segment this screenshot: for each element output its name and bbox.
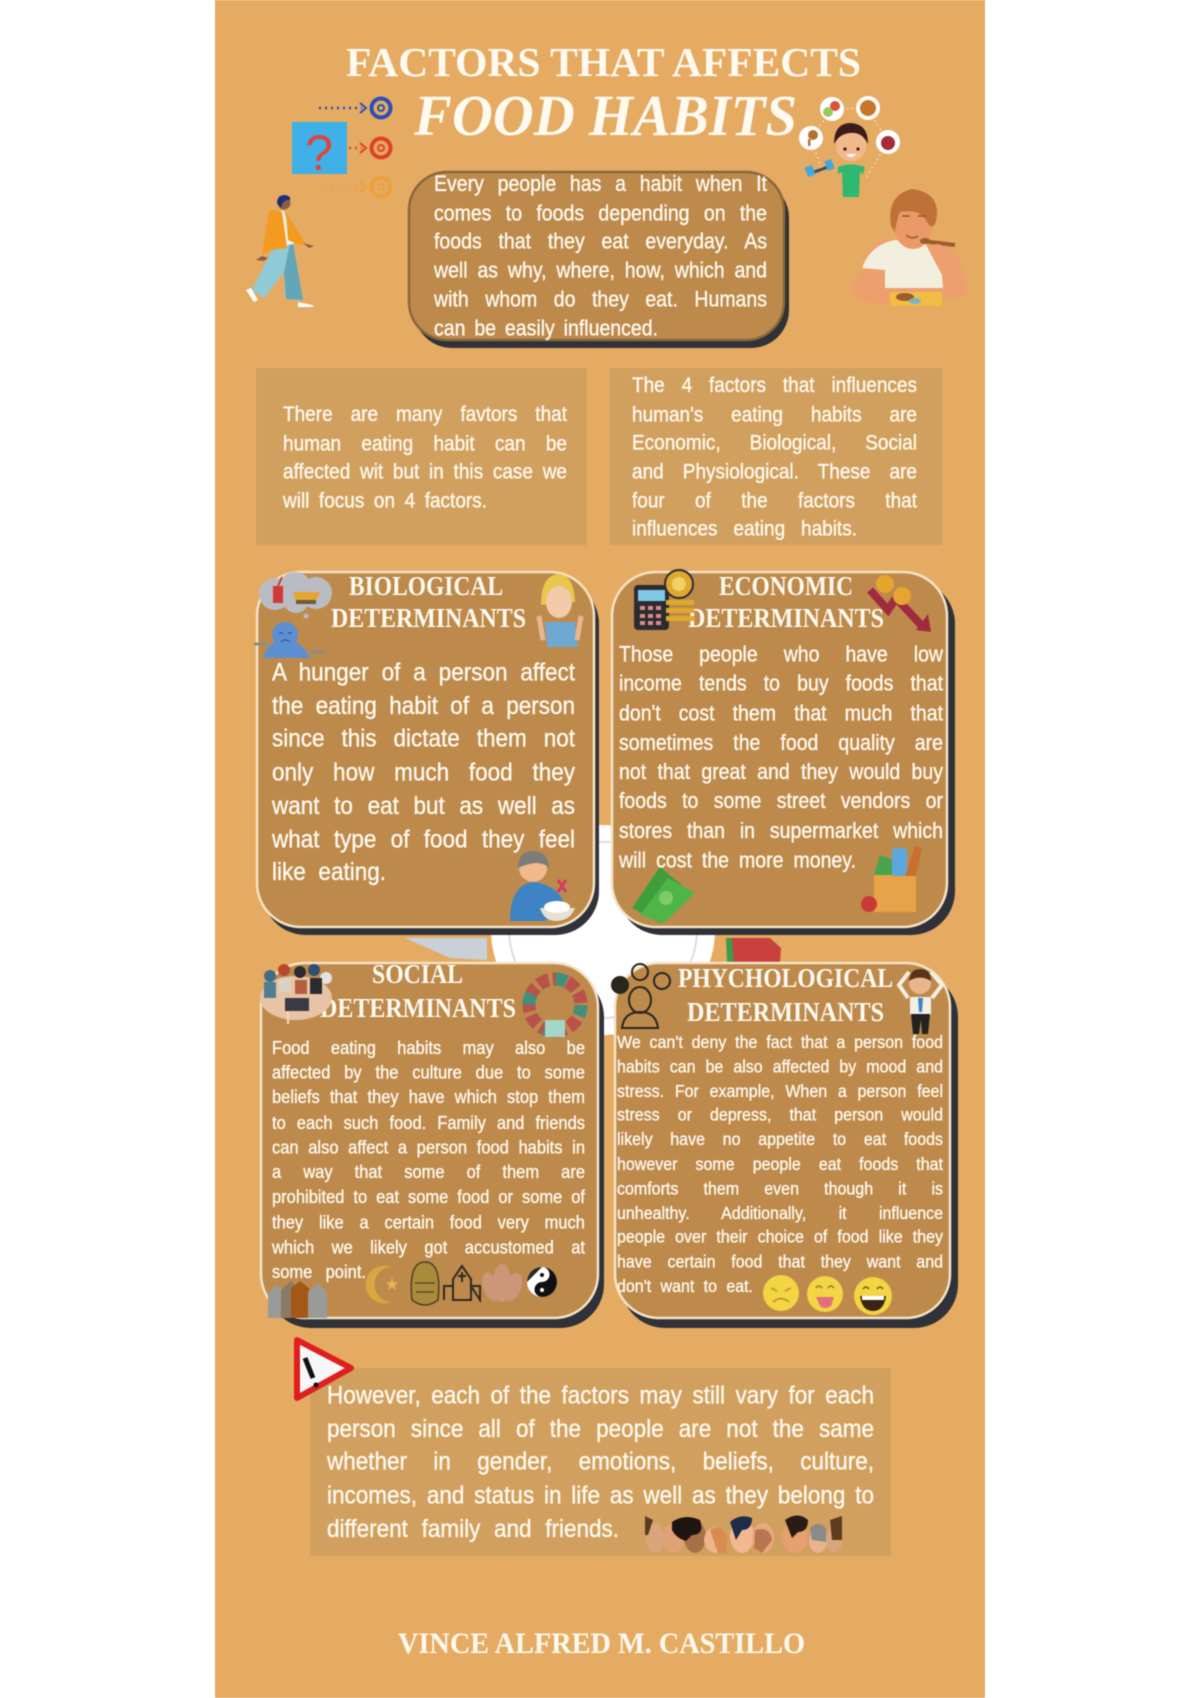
body text: prohibited to eat some food or some of — [272, 1188, 585, 1208]
icon: person eating — [852, 188, 966, 306]
card shape — [615, 963, 958, 1328]
heading: DETERMINANTS — [320, 993, 516, 1023]
text: four factors: human's eating habits are — [632, 403, 917, 426]
heading: SOCIAL — [372, 959, 463, 989]
intro text: foods that they eat everyday. As — [434, 230, 767, 254]
icon: person with no appetite — [510, 851, 575, 921]
body text: Those people who have low — [619, 642, 943, 667]
icon: crescent and star: ★ — [384, 1275, 400, 1295]
body text: however some people eat foods that — [617, 1155, 943, 1174]
text: four factors: influences eating habits. — [632, 518, 857, 541]
icon: stressed man — [899, 969, 942, 1034]
box shape — [407, 170, 790, 349]
page background — [215, 0, 985, 1698]
note text — [326, 1381, 874, 1543]
icon: blond boy with cutlery — [539, 574, 581, 647]
icon: blue arrow target — [319, 98, 390, 118]
body text: foods to some street vendors or — [619, 789, 943, 814]
body text: to each such food. Family and friends — [272, 1113, 585, 1133]
body text: unhealthy. Additionally, it influence — [617, 1204, 943, 1223]
icon: food thought cloud — [259, 572, 332, 618]
body text: will cost the more money. — [619, 848, 856, 873]
card shape — [612, 572, 955, 935]
icon: group of people — [268, 1281, 327, 1318]
note text: person since all of the people are not the same — [327, 1414, 874, 1442]
body text: people over their choice of food like they — [617, 1229, 943, 1248]
text: four factors: four of the factors that — [632, 489, 917, 513]
icon: banknotes — [632, 867, 695, 923]
icon: boy with food bubbles — [798, 95, 901, 198]
icon: buddha head — [411, 1262, 439, 1305]
text: four factors: and Physiological. These are — [632, 460, 917, 484]
body text: Food eating habits may also be — [272, 1038, 585, 1058]
body text: some point. — [272, 1262, 366, 1283]
body text: they like a certain food very much — [272, 1213, 585, 1233]
text: four factors: Economic, Biological, Social — [632, 432, 917, 455]
card shape — [257, 572, 599, 935]
body text: the eating habit of a person — [272, 692, 575, 720]
body text: stress. For example, When a person feel — [617, 1082, 943, 1101]
heading: ECONOMIC — [719, 571, 853, 601]
body text: don't cost them that much that — [619, 701, 943, 726]
text: many factors: affected wit but in this case we — [283, 461, 567, 484]
body text: don't want to eat. — [617, 1277, 753, 1296]
intro text: well as why, where, how, which and — [434, 258, 767, 283]
icon: red arrow target — [349, 138, 390, 158]
icon: question mark square: ? — [305, 125, 333, 181]
icon: orange arrow target — [319, 178, 390, 196]
panel: question icon with arrows — [291, 96, 394, 199]
icon: church — [444, 1266, 480, 1300]
heading: PHYCHOLOGICAL — [678, 963, 893, 993]
body text: habits can be also affected by mood and — [617, 1058, 943, 1077]
panel: intro box — [407, 170, 790, 349]
heading: BIOLOGICAL — [349, 571, 503, 601]
heading — [678, 963, 893, 1027]
text: many factors: will focus on 4 factors. — [283, 489, 487, 513]
icon: crescent and star — [366, 1266, 400, 1304]
body text — [616, 1033, 944, 1296]
body text — [271, 658, 576, 886]
icon: sad emoji — [763, 1275, 799, 1311]
footer: author name: VINCE ALFRED M. CASTILLO — [398, 1627, 805, 1660]
heading — [331, 571, 526, 633]
body text: sometimes the food quality are — [619, 730, 943, 755]
panel: biological determinants — [254, 570, 600, 936]
body text: can also affect a person food habits in — [272, 1138, 585, 1158]
note text: incomes, and status in life as well as they belong to — [327, 1480, 874, 1508]
text: many factors: human eating habit can be — [283, 432, 567, 455]
body text: income tends to buy foods that — [619, 672, 943, 696]
panel: social determinants — [259, 959, 605, 1329]
icon: head with gears — [612, 964, 670, 1028]
icon: row of faces — [644, 1514, 843, 1554]
body text: which we likely got accustomed at — [272, 1237, 585, 1258]
body text: stress or depress, that person would — [617, 1106, 943, 1126]
note background — [310, 1368, 891, 1556]
panel: four factors — [610, 368, 942, 545]
body text: We can't deny the fact that a person food — [617, 1033, 943, 1052]
panel: economic determinants — [610, 568, 956, 936]
intro text — [433, 172, 768, 341]
body text: want to eat but as well as — [272, 791, 575, 819]
body text: beliefs that they have which stop them — [272, 1088, 585, 1108]
body text: not that great and they would buy — [619, 760, 943, 784]
icon: calculator — [634, 585, 669, 630]
icon: warning triangle — [293, 1336, 355, 1402]
text: many factors: There are many favtors that — [283, 403, 567, 427]
text: four factors: The 4 factors that influences — [632, 374, 917, 398]
body text: likely have no appetite to eat foods — [617, 1131, 943, 1150]
icon: tongue emoji — [807, 1276, 843, 1312]
icon: gear and coins — [665, 570, 694, 621]
note text: whether in gender, emotions, beliefs, culture, — [327, 1447, 874, 1475]
text: many factors — [282, 403, 568, 513]
panel: psychological determinants — [610, 961, 959, 1329]
icon: grocery bag — [861, 846, 922, 912]
icon: lotus — [478, 1264, 526, 1304]
heading — [320, 959, 516, 1023]
body text: what type of food they feel — [272, 825, 575, 853]
intro text: comes to foods depending on the — [434, 201, 767, 226]
icon: crowd — [260, 964, 332, 1024]
title line: factors that affects: FACTORS THAT AFFECTS — [346, 39, 861, 85]
intro text: Every people has a habit when It — [434, 172, 767, 197]
heading — [688, 571, 884, 633]
body text: like eating. — [272, 858, 386, 886]
icon: yin yang — [527, 1267, 557, 1297]
body text: since this dictate them not — [272, 725, 575, 753]
icon: sad blue person — [254, 622, 325, 658]
body text: comforts them even though it is — [617, 1180, 943, 1199]
intro text: can be easily influenced. — [434, 316, 658, 341]
icon: circle of people — [529, 979, 581, 1037]
title line: food habits: FOOD HABITS — [413, 83, 797, 148]
body text: have certain food that they want and — [617, 1253, 943, 1272]
icon: question mark square — [292, 122, 347, 181]
note text: However, each of the factors may still vary for each — [327, 1381, 874, 1409]
icon: walking person — [246, 194, 314, 308]
heading: DETERMINANTS — [687, 997, 884, 1027]
card shape — [261, 963, 604, 1328]
body text — [618, 642, 944, 873]
body text: a way that some of them are — [272, 1163, 585, 1183]
body text: A hunger of a person affect — [272, 658, 575, 686]
body text — [271, 1038, 586, 1283]
note text: different family and friends. — [327, 1514, 619, 1542]
panel: closing note — [293, 1336, 891, 1556]
heading: DETERMINANTS — [688, 603, 884, 633]
icon: laughing emoji — [854, 1277, 892, 1315]
heading: DETERMINANTS — [331, 603, 526, 633]
intro text: with whom do they eat. Humans — [434, 287, 767, 312]
icon: falling money arrow — [870, 575, 931, 632]
body text: only how much food they — [272, 758, 575, 786]
panel: many factors — [256, 368, 587, 545]
body text: stores than in supermarket which — [619, 819, 943, 843]
title block — [346, 39, 861, 148]
text: four factors — [631, 374, 918, 541]
body text: affected by the culture due to some — [272, 1063, 585, 1083]
